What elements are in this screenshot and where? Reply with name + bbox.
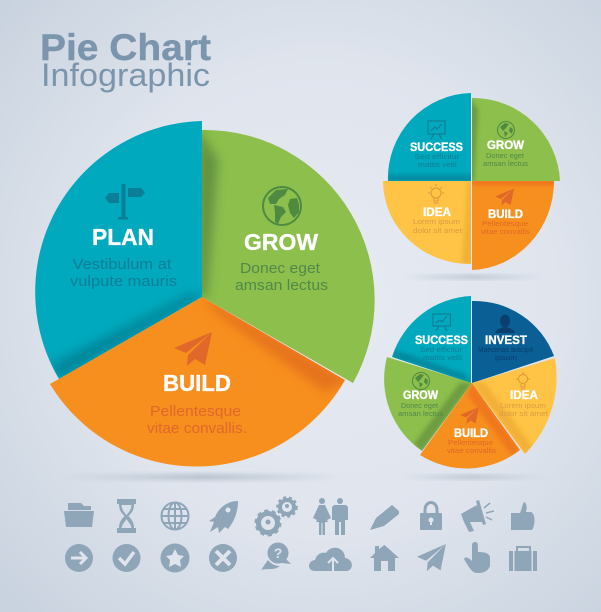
label: idea: dolor sit amet xyxy=(413,226,463,235)
icon: star circle xyxy=(160,544,190,572)
icon set xyxy=(64,498,537,573)
icon: chart board xyxy=(433,314,450,331)
small pie ground shadow xyxy=(400,275,545,279)
icon: signpost xyxy=(105,184,145,220)
label: plan xyxy=(70,224,177,290)
label: build: Pellentesque xyxy=(482,219,528,228)
label: build xyxy=(447,428,496,455)
icon: cloud upload xyxy=(309,548,352,571)
label: success: Sed efficitur xyxy=(420,345,463,354)
label: success: Sed efficitur xyxy=(414,152,460,161)
icon: pointing hand xyxy=(464,542,490,573)
label: grow xyxy=(398,390,443,418)
label: build: BUILD xyxy=(454,428,488,440)
icon: globe xyxy=(498,122,514,138)
label: grow: Donec eget xyxy=(486,151,525,160)
label: build: vitae convallis. xyxy=(147,421,247,437)
label: build xyxy=(481,209,530,236)
icon: lock xyxy=(420,502,442,530)
small pie: five segments xyxy=(384,296,557,468)
label: build: BUILD xyxy=(488,209,523,221)
icon: megaphone xyxy=(461,500,494,532)
icon: paper plane xyxy=(460,407,479,424)
label: idea xyxy=(413,207,463,235)
icon: gears xyxy=(256,498,296,535)
icon: briefcase xyxy=(509,547,537,571)
label: build: vitae convallis xyxy=(447,446,496,455)
icon: person xyxy=(495,314,515,333)
icon: rocket xyxy=(209,501,238,533)
slice: build xyxy=(420,383,520,468)
icon: pencil xyxy=(370,505,399,530)
slice: idea xyxy=(472,358,557,454)
label: plan: Vestibulum at xyxy=(72,256,172,273)
label: grow: GROW xyxy=(403,390,438,402)
icon: arrow circle xyxy=(65,544,93,572)
icon: light bulb xyxy=(428,184,444,203)
slice: invest xyxy=(472,301,554,383)
label: grow: amsan lectus xyxy=(398,409,443,418)
label: grow: amsan lectus xyxy=(483,159,528,168)
icon: paper plane xyxy=(174,332,212,366)
label: invest: ipsum xyxy=(495,353,517,362)
label: success: SUCCESS xyxy=(415,335,468,347)
label: grow: GROW xyxy=(487,140,524,152)
icon: folder xyxy=(64,503,94,527)
slice: success xyxy=(388,93,472,181)
icon: paper plane xyxy=(495,188,514,206)
icon: hourglass xyxy=(117,499,136,533)
label: success xyxy=(410,142,463,169)
slice: grow xyxy=(470,98,560,181)
label: success: SUCCESS xyxy=(410,142,463,154)
label: build: Pellentesque xyxy=(150,404,241,420)
label: grow: Donec eget xyxy=(401,401,439,410)
slice: plan xyxy=(35,121,202,379)
icon: thumbs up xyxy=(511,502,534,530)
icon: people xyxy=(313,498,348,535)
label: success xyxy=(415,335,468,362)
icon: wire globe xyxy=(162,502,188,530)
label: grow: Donec eget xyxy=(240,261,320,277)
icon: paper plane xyxy=(417,544,446,571)
label: success: mattis velit xyxy=(423,353,463,362)
slice: build xyxy=(50,295,350,467)
label: plan: vulpute mauris xyxy=(70,273,177,290)
label: grow xyxy=(235,229,328,294)
label: idea: dolor sit amet xyxy=(499,409,549,418)
label: grow: GROW xyxy=(244,229,318,255)
label: invest: Maecenas suscipit xyxy=(478,345,534,354)
label: invest xyxy=(478,335,534,362)
icon: chart board xyxy=(428,121,445,139)
title: Pie Chart xyxy=(40,27,211,68)
title xyxy=(40,27,211,93)
label: idea: Lorem ipsum xyxy=(413,217,460,226)
label: idea: IDEA xyxy=(423,207,451,219)
label: plan: PLAN xyxy=(92,224,154,250)
slice: grow xyxy=(198,128,375,383)
icon: close circle xyxy=(209,544,237,572)
title: Infographic xyxy=(41,57,210,93)
label: success: mattis velit xyxy=(418,160,458,169)
label: build xyxy=(147,370,247,437)
label: build: vitae convallis xyxy=(481,227,530,236)
icon: globe xyxy=(263,187,301,225)
slice: build xyxy=(472,180,556,270)
slice: success xyxy=(392,296,471,383)
label: grow: amsan lectus xyxy=(235,278,328,294)
label: grow xyxy=(483,140,528,168)
slice: grow xyxy=(384,357,472,451)
small pie: four segments xyxy=(383,93,560,270)
label: invest: INVEST xyxy=(485,335,527,347)
label: idea xyxy=(499,390,549,418)
label: idea: IDEA xyxy=(510,390,538,402)
label: idea: Lorem ipsum xyxy=(500,401,546,410)
icon: question bubbles: ? xyxy=(274,545,282,561)
icon: question bubbles xyxy=(261,542,291,570)
icon: light bulb xyxy=(516,372,530,389)
slice: idea xyxy=(383,181,472,264)
label: build: BUILD xyxy=(163,370,231,396)
main pie ground shadow xyxy=(60,474,345,480)
icon: house xyxy=(370,545,399,571)
small pie ground shadow xyxy=(400,475,545,479)
icon: check circle xyxy=(112,544,140,572)
label: build: Pellentesque xyxy=(448,438,493,447)
icon: globe xyxy=(412,372,430,390)
main pie chart xyxy=(35,121,375,467)
